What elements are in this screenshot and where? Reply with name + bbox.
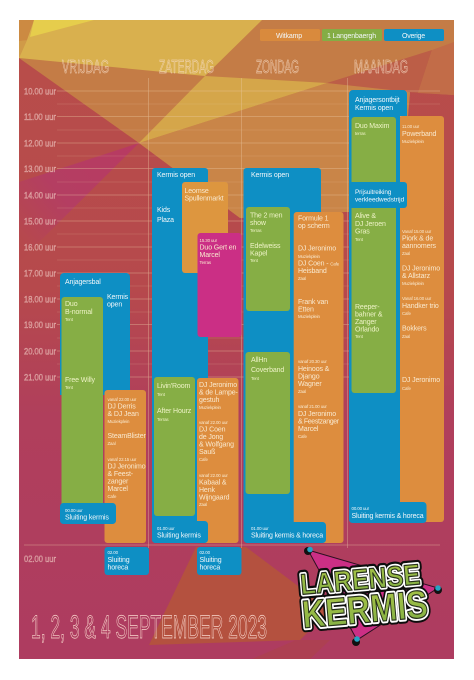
block: Sluiting horeca Vrijdag [104,547,149,575]
block: Tent Zondag 1: The 2 men [250,212,283,220]
block: Witkamp Zaterdag: Sauß [199,449,215,456]
block: Witkamp Zondag: Heinoos & [298,366,330,373]
block: Sluiting kermis Zaterdag: 01.00 uur [157,526,175,531]
block: Tent Zondag 2 [246,352,290,494]
block: Tent Maandag: Duo Maxim [355,123,390,130]
block: Sluiting kermis en horeca Zondag: 01.00 uur [251,526,269,531]
block: Witkamp Vrijdag: SteamBlister [108,433,147,440]
block: Sluiting kermis en horeca Maandag [349,502,426,523]
time labels: 20.00 uur [24,346,56,358]
block: Sluiting kermis Vrijdag [60,503,116,524]
block: Kermis open Zondag: Kermis open [251,172,289,179]
block: Witkamp Zaterdag: Kabaal & [199,480,227,486]
legend: 1 Langenbaergh [327,33,376,40]
block: Sluiting kermis en horeca Zondag [244,522,326,543]
block: Witkamp Maandag: Muziekplein [402,139,425,144]
block: Tent Zondag 1 [246,207,290,311]
block: Witkamp Zondag: vanaf 21.00 uur [298,404,327,409]
block: Prijsuitreiking: verkleedwedstrijd [355,196,405,204]
block: Witkamp Zondag: Muziekplein [298,314,321,319]
block: Witkamp Maandag: Vanaf 15.00 uur [402,229,432,234]
block: Witkamp Vrijdag: vanaf 22.00 uur [108,397,137,402]
block: Sluiting horeca Zaterdag: horeca [200,564,220,572]
block: Tent Zondag 1: Edelweiss [250,243,281,250]
block: Witkamp Zaterdag: vanaf 22.00 uur [199,420,228,425]
block: Kermis open Zaterdag: Plaza [157,217,174,224]
time labels: 02.00 uur [24,554,56,565]
block: Tent Maandag: Tent [355,237,364,242]
block: Witkamp Vrijdag: Zaal [108,441,116,446]
block: Witkamp Zondag: op scherm [298,223,330,230]
block: Sluiting kermis en horeca Maandag: Sluiting kermis & horeca [352,513,424,520]
block: Tent Vrijdag [62,297,103,507]
block: Sluiting horeca Zaterdag [197,547,242,575]
time labels: 10.00 uur [24,86,56,98]
block: Witkamp Zaterdag: de Jong [199,434,223,441]
block: Sluiting kermis en horeca Zondag: Sluiting kermis & horeca [251,532,323,540]
block: Sluiting kermis Zaterdag: Sluiting kermis [157,532,201,540]
block: Tent Zondag 1: Kapel [250,250,268,258]
block: Witkamp Zondag: Etten [298,306,314,314]
column: vrijdag [60,273,149,575]
logo triangle [308,550,438,640]
date line: 1, 2, 3 & 4 SEPTEMBER 2023 [31,609,267,645]
column: maandag [349,90,444,523]
logo wordmark: LARENSE [299,559,421,602]
block: Tent Maandag: DJ Jeroen [355,221,386,228]
column: zaterdag [152,168,242,575]
block: Witkamp Maandag: DJ Jeronimo [402,377,440,384]
logo wordmark: LARENSE [299,559,421,602]
block: Witkamp Zondag: Formule 1 [298,216,329,222]
block: Spullenmarkt: Spullenmarkt [184,196,224,202]
logo: Larense Kermis [298,547,442,646]
block: Witkamp Vrijdag: Muziekplein [108,419,130,424]
block: Tent Vrijdag: Tent [65,385,74,390]
block: Witkamp Zondag: Heisband [298,268,327,275]
block: Witkamp Vrijdag: Cafe [108,494,117,499]
block: Witkamp Zaterdag: DJ Jeronimo [199,382,237,389]
block: Tent Vrijdag: Duo [65,301,78,308]
block: Witkamp Maandag: Zaal [402,251,410,256]
block: Tent Zondag 1: Tent [250,258,259,263]
block: Overige Maandag [349,90,407,510]
block: Duo Gert en Marcel: Terras [200,260,212,265]
block: Tent Maandag: Orlando [355,326,379,334]
block: Witkamp Maandag [400,116,444,522]
block: Witkamp Zondag: Cafe [298,434,307,439]
block: Tent Vrijdag: B-normal [65,309,93,316]
block: Witkamp Maandag: Cafe [402,386,411,391]
block: Witkamp Maandag: 11.00 uur [402,124,420,129]
block: Sluiting kermis Vrijdag: 00.00 uur [65,508,83,513]
block: Tent Maandag: Reeper- [355,304,380,311]
block: Witkamp Zaterdag: gestuh [199,397,220,404]
block: Witkamp Maandag: Piork & de [402,236,433,242]
time labels: 13.00 uur [24,164,56,175]
block: Kermis open Zaterdag: Kermis open [157,172,195,179]
block: Prijsuitreiking [349,182,407,208]
block: Duo Gert en Marcel: Duo Gert en [200,244,237,252]
block: Sluiting kermis Zaterdag [152,521,208,543]
block: Witkamp Vrijdag: & Feest- [108,471,134,478]
block: Witkamp Vrijdag: DJ Derris [108,404,136,410]
time labels: 12.00 uur [24,138,56,150]
block: Witkamp Zaterdag: Wijngaard [199,494,230,502]
block: Witkamp Vrijdag [104,390,147,543]
block: Duo Gert en Marcel [198,233,242,337]
time grid [24,78,440,548]
block: Tent Zondag 2: Coverband [251,367,284,374]
block: Prijsuitreiking: Prijsuitreiking [355,189,392,196]
block: Anjagersbal [60,273,130,395]
block: Witkamp Maandag: Cafe [402,311,411,316]
block: Witkamp Zaterdag: DJ Coen [199,426,226,434]
block: Witkamp Vrijdag: DJ Jeronimo [108,464,146,470]
block: Witkamp Maandag: Muziekplein [402,281,425,286]
logo wordmark: LARENSE [299,559,421,602]
block: Witkamp Zaterdag: & Wolfgang [199,442,234,448]
block: Sluiting horeca Vrijdag: 02.00 [108,550,119,555]
time labels: 14.00 uur [24,190,56,202]
block: Tent Maandag: Zanger [355,319,377,326]
block: Witkamp Zaterdag: Cafe [199,457,208,462]
logo wordmark [298,559,430,637]
block: Tent Maandag: Alive & [355,213,376,220]
block: Sluiting horeca Vrijdag: horeca [108,564,128,572]
day headings: ZONDAG [256,57,299,77]
block: Sluiting kermis en horeca Maandag: 00.00 uur [352,506,370,511]
block: Tent Zondag 2: AllHn [251,357,267,364]
block: Spullenmarkt [182,182,228,273]
block: Witkamp Zondag: DJ Coen - Cafe [298,260,340,268]
block: Witkamp Vrijdag: Marcel [108,486,128,493]
day headings: ZATERDAG [159,57,214,77]
time labels: 18.00 uur [24,294,56,306]
block: Witkamp Maandag: Bokkers [402,326,427,332]
legend: Witkamp [276,33,302,40]
block: Tent Vrijdag: Free Willy [65,377,96,384]
time labels [24,86,56,565]
block: Witkamp Maandag: aannomers [402,243,437,250]
block: Witkamp Vrijdag: vanaf 22.15 uur [108,457,137,462]
block: Sluiting horeca Zaterdag: 02.00 [200,550,211,555]
block: Tent Vrijdag: Tent [65,317,74,322]
time labels: 21.00 uur [24,372,56,384]
block: Tent Zaterdag: Livin'Room [157,383,190,390]
block: Tent Maandag: Gras [355,228,370,236]
block: Spullenmarkt: Leomse [184,188,209,195]
legend: Overige [402,33,425,40]
block: Witkamp Zondag: Zaal [298,389,306,394]
time labels: 17.00 uur [24,268,56,280]
day headings [62,57,408,77]
block: Duo Gert en Marcel: Marcel [200,252,220,259]
block: Tent Zaterdag: Terras [157,417,169,422]
block: Witkamp Maandag: DJ Jeronimo [402,266,440,272]
block: Witkamp Vrijdag: zanger [108,478,129,486]
block: Kermis open Zaterdag: Kids [157,207,171,214]
block: Witkamp Zaterdag: & de Lampe- [199,390,239,396]
time labels: 16.00 uur [24,242,56,254]
day headings: VRIJDAG [62,57,109,77]
block: Witkamp Zondag: & Feestzanger [298,418,340,426]
block: Duo Gert en Marcel: 15.30 uur [200,238,218,243]
block: Tent Zondag 1: Terras [250,228,262,233]
logo dots [304,547,442,646]
block: Witkamp Zondag: Muziekplein [298,254,321,259]
time labels: 15.00 uur [24,216,56,228]
block: Witkamp Maandag: & Allstarz [402,273,431,280]
legend [260,29,444,41]
block: Sluiting horeca Zaterdag: Sluiting [200,557,222,564]
logo wordmark: KERMIS [300,583,430,637]
block: Tent Zaterdag: After Hourz [157,408,192,415]
block: Witkamp Zondag: Marcel [298,426,319,433]
block: Witkamp Maandag: Handker trio [402,303,439,310]
time labels: 11.00 uur [24,112,56,123]
block: Tent Zondag 1: show [250,220,267,227]
logo wordmark: KERMIS [300,583,430,637]
block: Tent Zaterdag: Tent [157,392,166,397]
block: Tent Maandag: bahner & [355,312,383,318]
block: Tent Maandag: terras [355,131,366,136]
block: Witkamp Vrijdag: & DJ Jean [108,411,139,418]
block: Sluiting horeca Vrijdag: Sluiting [108,557,130,564]
block: Witkamp Zaterdag: vanaf 22.00 uur [199,473,228,478]
block: Anjagersbal: Kermis [107,294,129,301]
block: Witkamp Zondag: Frank van [298,299,328,306]
day headings: MAANDAG [354,57,408,77]
block: Witkamp Maandag: Vanaf 16.00 uur [402,296,432,301]
block: Witkamp Zondag: Wagner [298,381,322,388]
block: Witkamp Zaterdag: Henk [199,487,215,494]
block: Witkamp Zondag: Django [298,374,320,380]
block: Witkamp Zondag: DJ Jeronimo [298,411,336,418]
block: Tent Zaterdag [154,377,195,516]
block: Tent Maandag [352,117,396,393]
block: Overige Zaterdag body [152,395,208,543]
block: Anjagersbal: Anjagersbal [65,279,101,286]
block: Tent Maandag: Tent [355,334,364,339]
block: Sluiting kermis Vrijdag: Sluiting kermis [65,514,109,522]
block: Witkamp Zondag [294,212,344,543]
block: Kermis open Zondag [244,168,326,543]
block: Overige Maandag: Kermis open [355,105,393,112]
block: Witkamp Zaterdag [197,378,239,543]
block: Witkamp Zaterdag: Zaal [199,502,207,507]
block: Overige Maandag: Anjagersontbijt [355,97,400,104]
block: Witkamp Maandag: Zaal [402,334,410,339]
block: Witkamp Zondag: Zaal [298,276,306,281]
block: Kermis open Zaterdag [152,168,208,400]
block: Witkamp Zondag: DJ Jeronimo [298,246,336,252]
block: Anjagersbal: open [107,302,122,308]
logo wordmark: KERMIS [300,583,430,637]
block: Witkamp Zaterdag: Muziekplein [199,405,222,410]
column: zondag [244,168,344,543]
block: Witkamp Maandag: Powerband [402,131,437,138]
block: Witkamp Zondag: vanaf 20.30 uur [298,359,327,364]
block: Tent Zondag 2: Tent [251,376,260,381]
time labels: 19.00 uur [24,320,56,331]
